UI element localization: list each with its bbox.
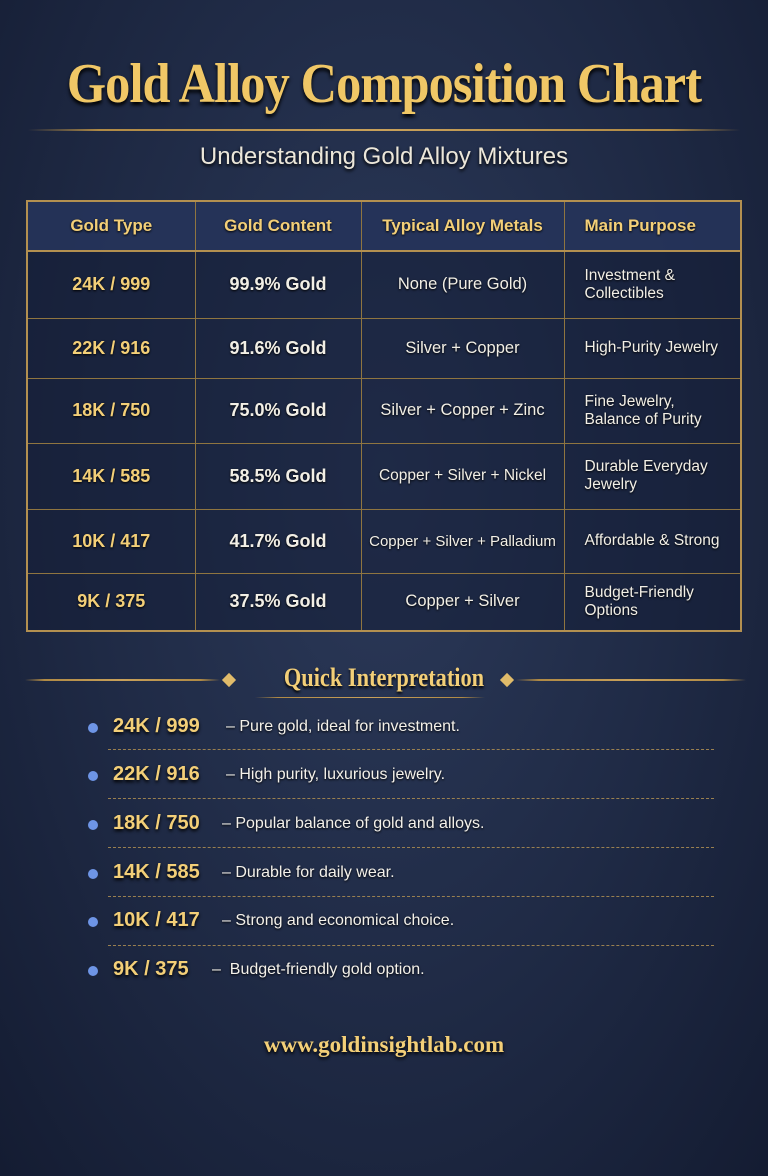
heading: Quick Interpretation xyxy=(26,663,744,698)
list item 3: 18K / 750 xyxy=(113,812,200,834)
heading: Quick Interpretation: Quick Interpretation xyxy=(284,663,484,692)
list item 5: 10K / 417 xyxy=(113,909,200,931)
table: gold alloy composition: Silver + Copper xyxy=(405,338,520,356)
title: Gold Alloy Composition Chart xyxy=(67,53,701,115)
table: gold alloy composition: Copper + Silver + Nickel xyxy=(379,467,546,484)
subtitle: Understanding Gold Alloy Mixtures xyxy=(200,143,568,170)
table: gold alloy composition: Balance of Purity xyxy=(584,410,702,428)
table: gold alloy composition: None (Pure Gold) xyxy=(398,275,527,293)
list item 3 xyxy=(88,812,484,834)
table: gold alloy composition: Copper + Silver + Palladium xyxy=(369,532,556,550)
table: gold alloy composition: Gold Content xyxy=(224,216,332,235)
table: gold alloy composition: 58.5% Gold xyxy=(229,466,327,486)
table: gold alloy composition: 9K / 375 xyxy=(77,591,145,611)
table: gold alloy composition: Fine Jewelry, xyxy=(584,392,675,410)
table: gold alloy composition: Durable Everyday xyxy=(584,458,708,475)
list item 6: 9K / 375 xyxy=(113,958,189,980)
table: gold alloy composition: 14K / 585 xyxy=(72,466,150,486)
list item 2: 22K / 916 xyxy=(113,763,200,785)
list item 1 xyxy=(88,715,460,737)
table: gold alloy composition: Silver + Copper + Zinc xyxy=(380,401,545,419)
table: gold alloy composition: Jewelry xyxy=(584,476,637,493)
list item 6 xyxy=(88,958,425,980)
table: gold alloy composition: Collectibles xyxy=(584,285,664,302)
table: gold alloy composition: 18K / 750 xyxy=(72,400,150,420)
table: gold alloy composition: Copper + Silver xyxy=(405,592,520,610)
list item 3: – Popular balance of gold and alloys. xyxy=(222,815,484,832)
table: gold alloy composition: Affordable & Strong xyxy=(584,532,720,549)
table: gold alloy composition: Typical Alloy Metals xyxy=(382,216,543,235)
table: gold alloy composition: 41.7% Gold xyxy=(229,530,327,550)
table: gold alloy composition: 24K / 999 xyxy=(72,274,150,294)
list item 5 xyxy=(88,909,454,931)
list item 1: – Pure gold, ideal for investment. xyxy=(226,718,460,735)
list item 1: 24K / 999 xyxy=(113,715,200,737)
table: gold alloy composition xyxy=(26,200,742,632)
table: gold alloy composition: High-Purity Jewelry xyxy=(584,339,718,356)
table: gold alloy composition: 91.6% Gold xyxy=(229,338,327,358)
table: gold alloy composition: 10K / 417 xyxy=(72,530,150,550)
table: gold alloy composition: Investment & xyxy=(584,267,675,284)
table: gold alloy composition: 75.0% Gold xyxy=(229,400,327,420)
table: gold alloy composition: 22K / 916 xyxy=(72,338,150,358)
table: gold alloy composition: 99.9% Gold xyxy=(229,274,327,294)
table: gold alloy composition: 37.5% Gold xyxy=(229,591,327,611)
list item 2 xyxy=(88,763,445,785)
list item 6: – Budget-friendly gold option. xyxy=(212,961,425,978)
list item 5: – Strong and economical choice. xyxy=(222,912,454,929)
table: gold alloy composition: Budget-Friendly xyxy=(584,584,694,601)
list item 4: – Durable for daily wear. xyxy=(222,864,395,881)
table: gold alloy composition: Options xyxy=(584,602,638,619)
list item 4 xyxy=(88,861,395,883)
list item 2: – High purity, luxurious jewelry. xyxy=(226,766,445,783)
list item 4: 14K / 585 xyxy=(113,861,200,883)
footer url: www.goldinsightlab.com xyxy=(264,1032,504,1057)
table: gold alloy composition: Main Purpose xyxy=(584,216,696,235)
table: gold alloy composition: Gold Type xyxy=(70,216,152,235)
